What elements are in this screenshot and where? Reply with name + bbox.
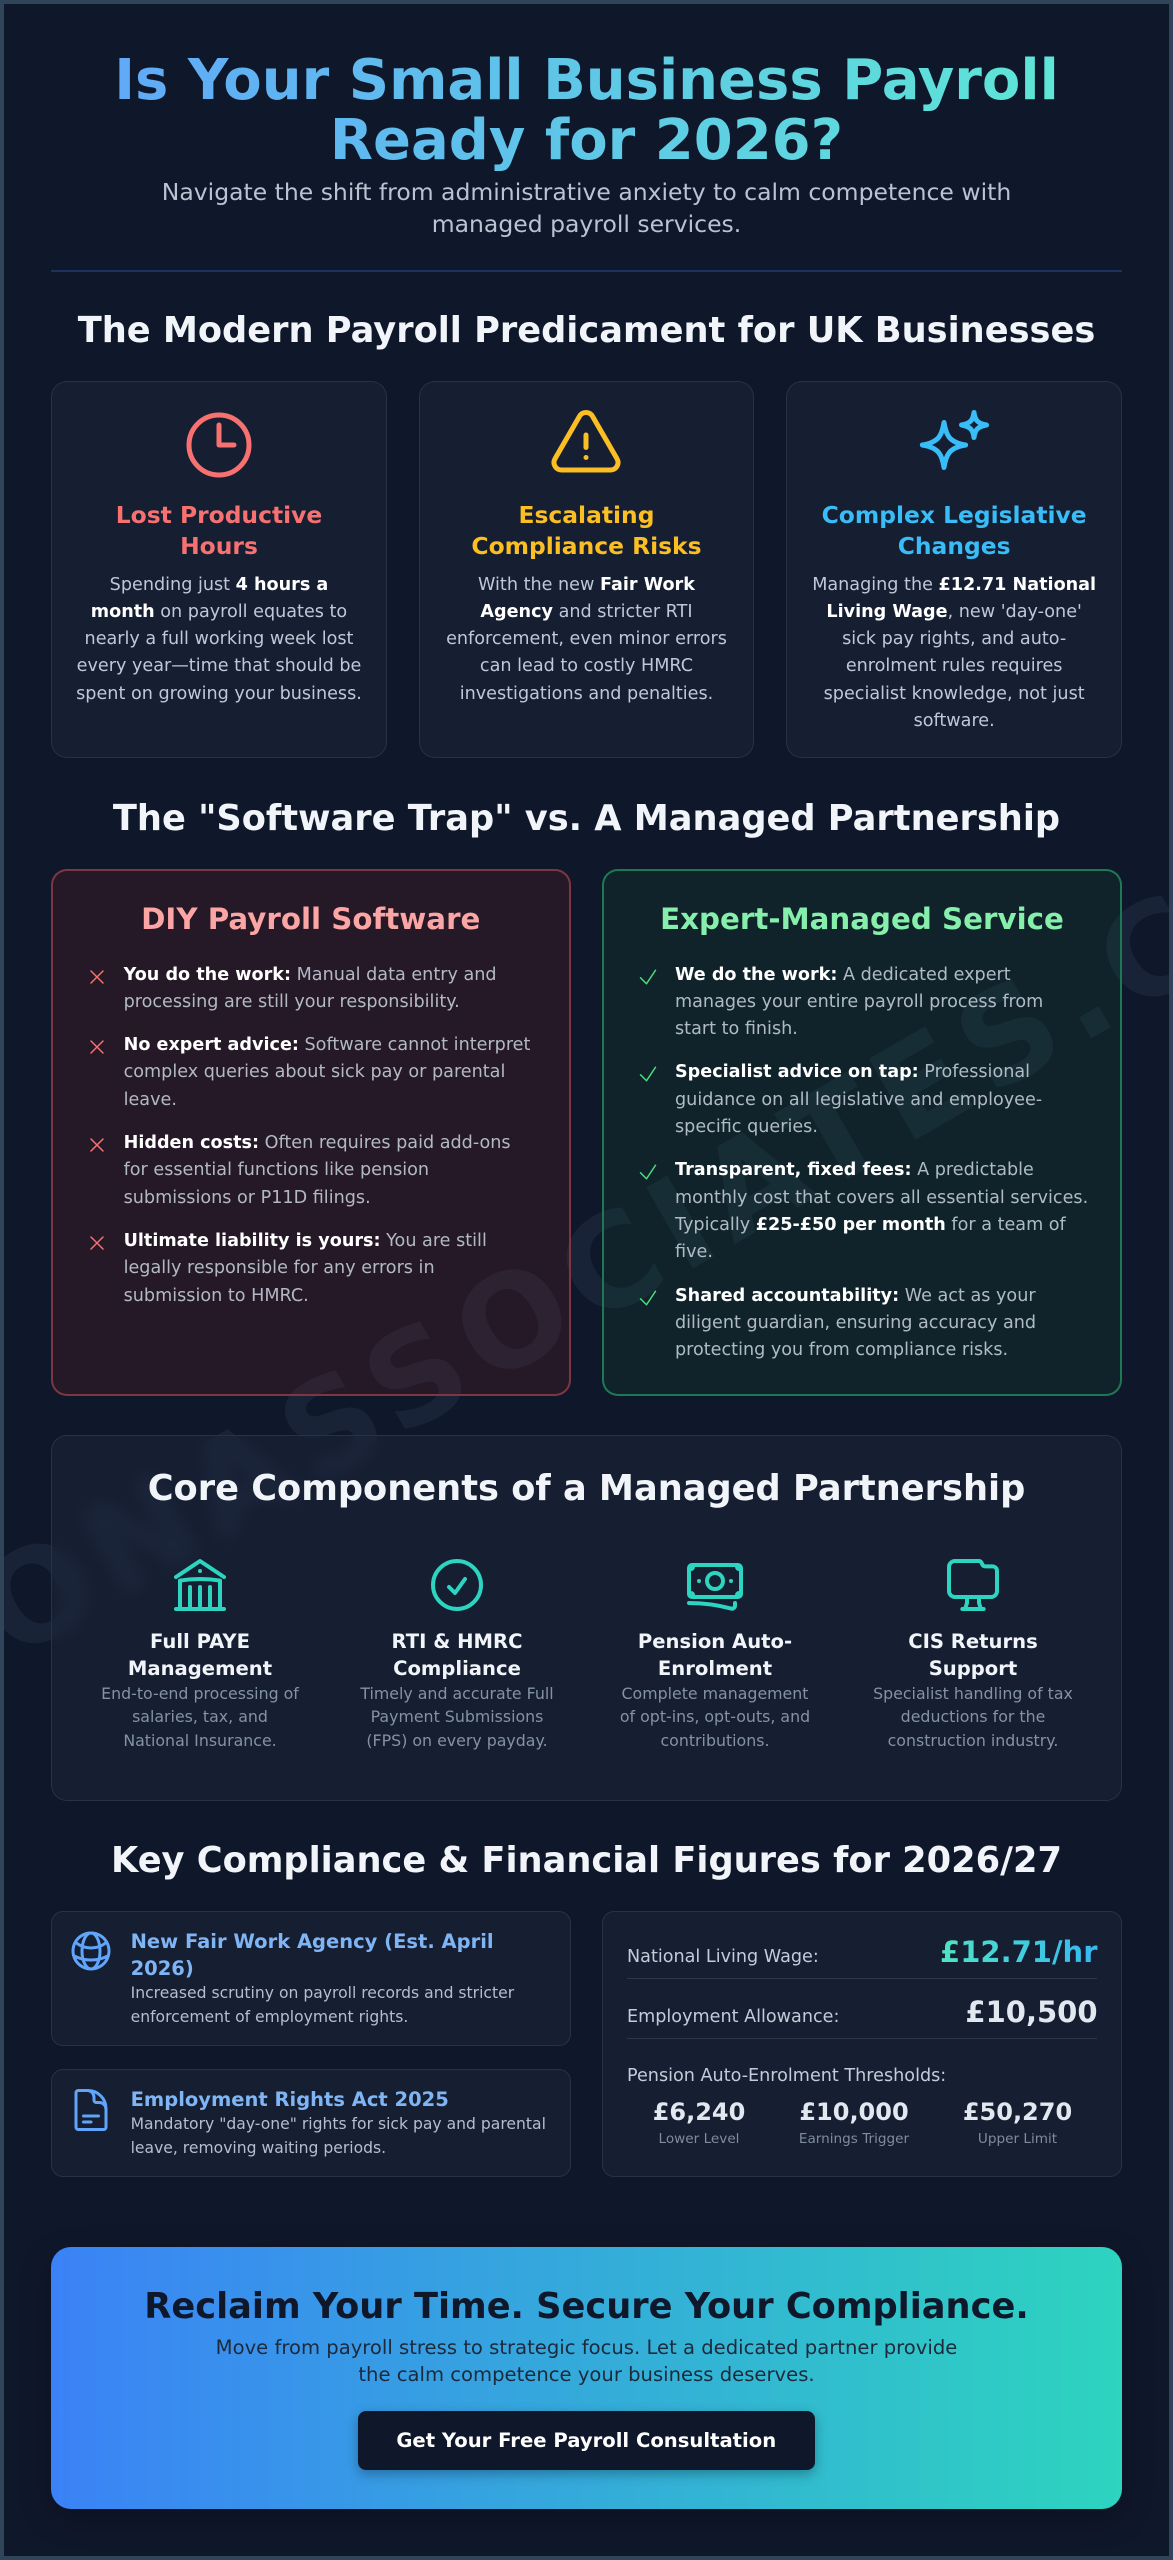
icon: sparkles — [920, 410, 989, 470]
list of drawbacks: legally responsible for any errors in — [124, 1258, 435, 1278]
header — [114, 48, 1059, 238]
item text — [131, 1984, 514, 2026]
list of benefits: diligent guardian, ensuring accuracy and — [675, 1313, 1036, 1333]
list of drawbacks: submissions or P11D filings. — [124, 1188, 371, 1208]
card heading: Compliance Risks — [471, 532, 702, 560]
list of drawbacks: processing are still your responsibility. — [124, 992, 460, 1012]
component text: construction industry. — [888, 1731, 1058, 1750]
card heading — [822, 501, 1087, 560]
list of benefits: Transparent, fixed fees: A predictable — [675, 1160, 1034, 1180]
list of benefits: start to finish. — [675, 1019, 798, 1039]
list of benefits: manages your entire payroll process from — [675, 992, 1043, 1012]
card text: With the new Fair Work — [478, 575, 695, 595]
threshold: lower level — [653, 2098, 745, 2147]
panel: compliance risks — [419, 381, 754, 758]
component title: Compliance — [393, 1657, 521, 1680]
title — [51, 51, 1122, 171]
stat: employment allowance — [627, 1995, 1098, 2029]
CTA button: Get Your Free Payroll Consultation — [396, 2429, 776, 2452]
card text: Agency and stricter RTI — [480, 602, 693, 622]
component title: Pension Auto- — [638, 1630, 792, 1653]
component text: Complete management — [622, 1684, 808, 1703]
card text: Living Wage, new 'day-one' — [826, 602, 1082, 622]
component title: Full PAYE — [150, 1630, 250, 1653]
component text: salaries, tax, and — [132, 1707, 268, 1726]
list of drawbacks: Ultimate liability is yours: You are still — [124, 1231, 487, 1251]
item text: leave, removing waiting periods. — [131, 2138, 386, 2156]
component title: Management — [128, 1657, 272, 1680]
card heading: Escalating — [518, 501, 654, 529]
title: Is Your Small Business Payroll — [114, 48, 1059, 113]
stat: national living wage: National Living Wage: — [627, 1947, 819, 1967]
threshold: earnings trigger: £10,000 — [799, 2098, 909, 2126]
threshold: earnings trigger: Earnings Trigger — [799, 2131, 909, 2147]
panel: legislative changes — [786, 381, 1122, 758]
component text: of opt-ins, opt-outs, and — [620, 1707, 810, 1726]
component title: Support — [929, 1657, 1017, 1680]
card text: software. — [914, 711, 995, 731]
item heading: 2026) — [131, 1957, 194, 1980]
call to action panel — [51, 2247, 1122, 2509]
component: Pension — [620, 1563, 810, 1750]
component text: End-to-end processing of — [101, 1684, 299, 1703]
icon: banknote — [687, 1563, 743, 1611]
list of drawbacks: leave. — [124, 1090, 177, 1110]
card heading: Complex Legislative — [822, 501, 1087, 529]
threshold: upper limit: £50,270 — [963, 2098, 1072, 2126]
component title: CIS Returns — [908, 1630, 1038, 1653]
heading: key figures: Key Compliance & Financial Figures for 2026/27 — [111, 1840, 1062, 1881]
card text — [446, 575, 727, 704]
card text: can lead to costly HMRC — [480, 656, 693, 676]
panel: fair work agency — [51, 1911, 571, 2046]
list of benefits: Shared accountability: We act as your — [675, 1286, 1036, 1306]
threshold: earnings trigger — [799, 2098, 910, 2147]
list of drawbacks: No expert advice: Software cannot interpret — [124, 1035, 530, 1055]
icon: monitor — [947, 1559, 999, 1611]
card text: every year—time that should be — [77, 656, 361, 676]
component: Full PAYE — [101, 1559, 300, 1750]
panel heading: DIY Payroll Software — [141, 902, 480, 936]
item text: Increased scrutiny on payroll records and stricter — [131, 1984, 514, 2002]
card text — [76, 575, 362, 704]
component: RTI & HMRC — [360, 1559, 554, 1750]
icon: warning triangle — [551, 410, 621, 472]
list of benefits: guidance on all legislative and employee- — [675, 1090, 1042, 1110]
threshold: upper limit: Upper Limit — [978, 2131, 1057, 2147]
card text: enrolment rules requires — [846, 656, 1062, 676]
panel: employment rights act — [51, 2069, 571, 2177]
list of drawbacks — [90, 965, 530, 1306]
item text — [131, 2115, 546, 2156]
component title: Enrolment — [658, 1657, 772, 1680]
component text: National Insurance. — [123, 1731, 277, 1750]
list of drawbacks: complex queries about sick pay or parental — [124, 1062, 505, 1082]
panel: lost productive hours — [51, 381, 387, 758]
panel: expert-managed service — [602, 869, 1122, 1396]
icon: check circle — [431, 1559, 483, 1611]
component text — [873, 1684, 1073, 1750]
card text: enforcement, even minor errors — [446, 629, 727, 649]
CTA button — [358, 2411, 814, 2470]
threshold: lower level: £6,240 — [653, 2098, 745, 2126]
icon: document — [74, 2089, 108, 2131]
list of benefits: monthly cost that covers all essential services. — [675, 1188, 1088, 1208]
component title — [638, 1630, 792, 1680]
list of benefits — [640, 965, 1088, 1360]
icon: clock — [186, 412, 252, 478]
CTA heading: Reclaim Your Time. Secure Your Compliance. — [144, 2286, 1029, 2327]
item text: Mandatory "day-one" rights for sick pay and parental — [131, 2115, 546, 2133]
panel heading: Expert-Managed Service — [660, 902, 1064, 936]
card text — [812, 575, 1096, 731]
component title: RTI & HMRC — [392, 1630, 522, 1653]
component text: deductions for the — [901, 1707, 1045, 1726]
component text: Timely and accurate Full — [360, 1684, 554, 1703]
card text: spent on growing your business. — [76, 684, 362, 704]
component text: Specialist handling of tax — [873, 1684, 1073, 1703]
component title — [392, 1630, 522, 1680]
card text: specialist knowledge, not just — [824, 684, 1085, 704]
card text: Managing the £12.71 National — [812, 575, 1096, 595]
card text: nearly a full working week lost — [85, 629, 353, 649]
component text — [620, 1684, 810, 1750]
component text: contributions. — [660, 1731, 770, 1750]
card text: sick pay rights, and auto- — [842, 629, 1066, 649]
threshold: lower level: Lower Level — [659, 2131, 739, 2147]
item heading: New Fair Work Agency (Est. April — [131, 1930, 494, 1953]
stat: national living wage: £12.71/hr — [940, 1935, 1098, 1969]
component text: Payment Submissions — [371, 1707, 543, 1726]
list of benefits: Typically £25-£50 per month for a team of — [675, 1215, 1066, 1235]
CTA text: Move from payroll stress to strategic focus. Let a dedicated partner provide — [216, 2336, 957, 2358]
list of benefits: protecting you from compliance risks. — [675, 1340, 1008, 1360]
panel: key figures — [602, 1911, 1122, 2177]
CTA text: the calm competence your business deserves. — [358, 2363, 815, 2386]
component title — [128, 1630, 272, 1680]
title: Ready for 2026? — [330, 108, 843, 173]
list of benefits: Specialist advice on tap: Professional — [675, 1062, 1030, 1082]
card text: investigations and penalties. — [460, 684, 713, 704]
item text: enforcement of employment rights. — [131, 2008, 408, 2026]
card heading: Hours — [180, 532, 258, 560]
icon: globe — [72, 1932, 110, 1970]
component text — [101, 1684, 300, 1750]
panel: DIY payroll software — [51, 869, 570, 1396]
list of drawbacks: Hidden costs: Often requires paid add-ons — [124, 1133, 511, 1153]
component text — [360, 1684, 554, 1750]
card text: month on payroll equates to — [91, 602, 347, 622]
subtitle: Navigate the shift from administrative anxiety to calm competence with — [162, 178, 1011, 206]
card text: Spending just 4 hours a — [110, 575, 328, 595]
list of drawbacks: submission to HMRC. — [124, 1286, 309, 1306]
label: pension thresholds: Pension Auto-Enrolment Thresholds: — [627, 2066, 946, 2086]
component text: (FPS) on every payday. — [366, 1731, 548, 1750]
icon: bank — [174, 1559, 226, 1611]
stat: employment allowance: Employment Allowance: — [627, 2007, 839, 2027]
stat: employment allowance: £10,500 — [965, 1995, 1098, 2029]
subtitle — [162, 178, 1011, 238]
card heading: Changes — [898, 532, 1011, 560]
item heading — [131, 1930, 494, 1980]
component: CIS — [873, 1559, 1073, 1750]
heading: predicament: The Modern Payroll Predicament for UK Businesses — [78, 310, 1095, 351]
threshold: upper limit — [963, 2098, 1072, 2147]
card heading: Lost Productive — [116, 501, 322, 529]
card heading — [116, 501, 322, 560]
list of benefits: We do the work: A dedicated expert — [675, 965, 1011, 985]
panel heading: Core Components of a Managed Partnership — [148, 1468, 1025, 1509]
panel: core components — [51, 1435, 1122, 1801]
item heading: Employment Rights Act 2025 — [131, 2088, 449, 2111]
stat: national living wage — [627, 1935, 1098, 1969]
list of benefits: five. — [675, 1242, 713, 1262]
card heading — [471, 501, 702, 560]
list of drawbacks: for essential functions like pension — [124, 1160, 429, 1180]
list of drawbacks: You do the work: Manual data entry and — [124, 965, 497, 985]
subtitle: managed payroll services. — [432, 210, 741, 238]
component title — [908, 1630, 1038, 1680]
heading: software trap: The "Software Trap" vs. A Managed Partnership — [113, 798, 1060, 839]
list of benefits: specific queries. — [675, 1117, 818, 1137]
CTA text — [216, 2336, 957, 2386]
